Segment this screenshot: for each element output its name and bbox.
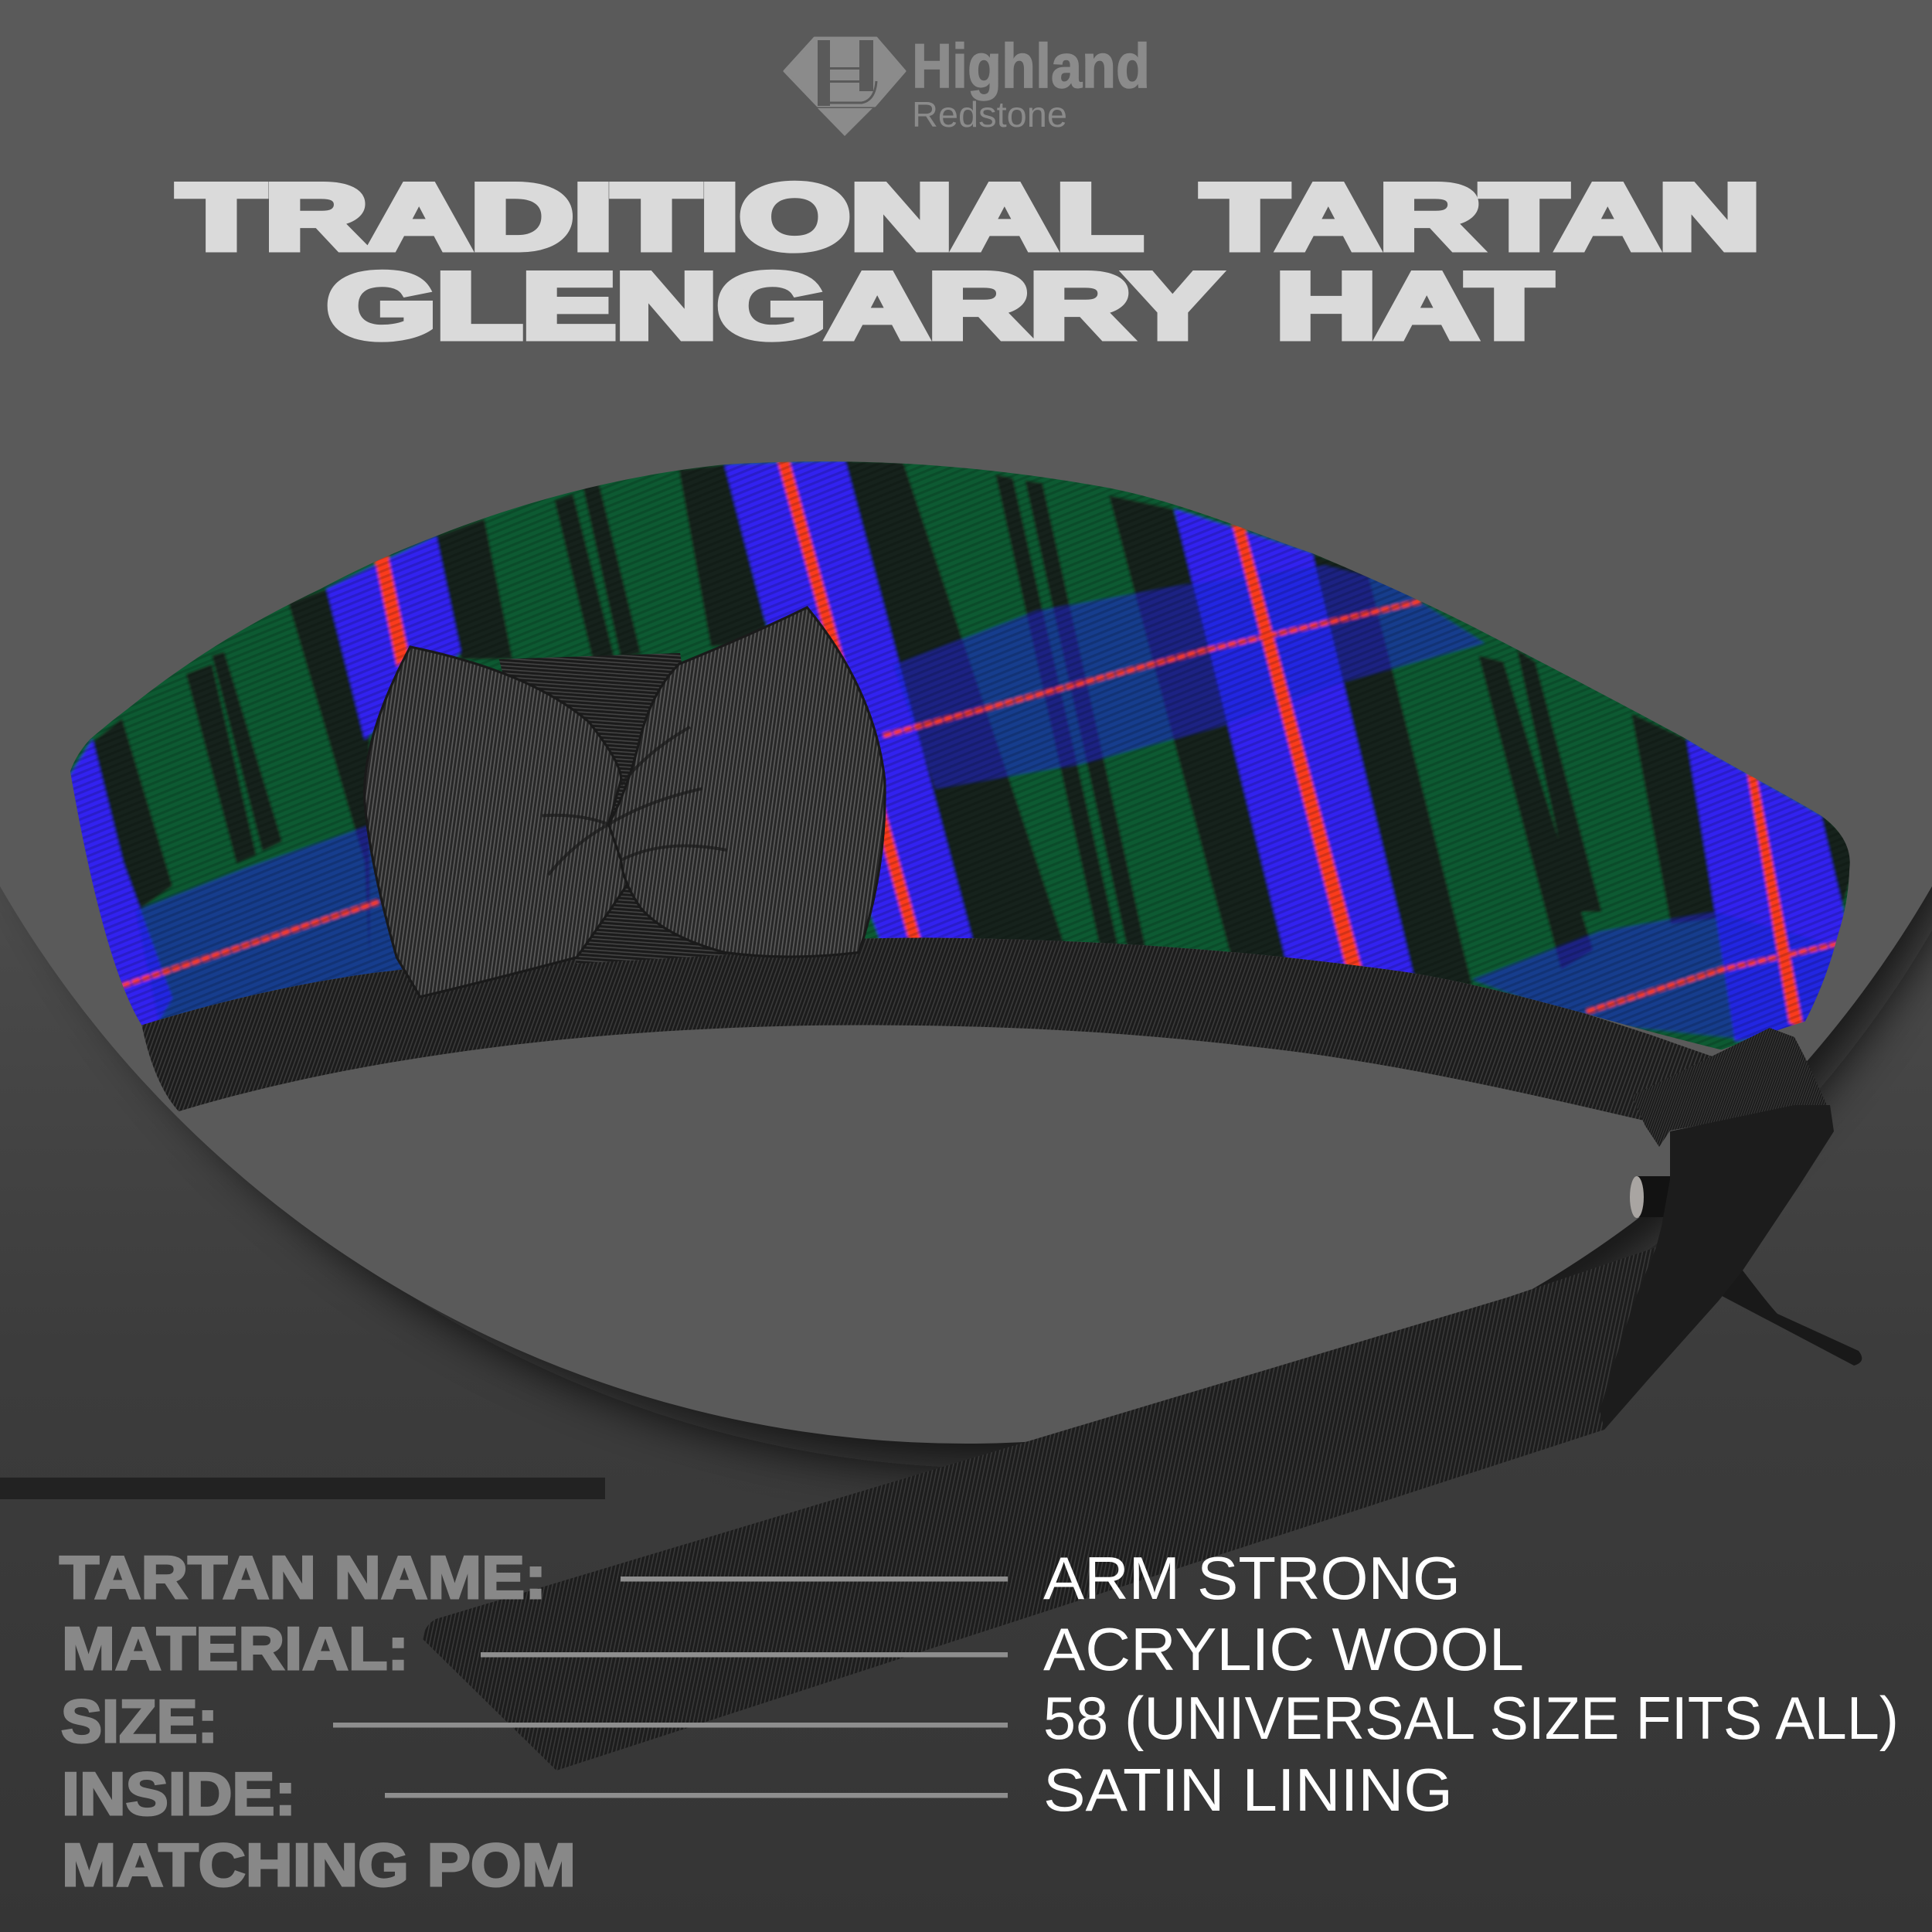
tartan crown bbox=[49, 444, 1872, 1060]
crown and bow bbox=[49, 444, 1872, 1124]
value: material: ACRYLIC WOOL bbox=[1043, 1615, 1524, 1683]
headband bbox=[141, 937, 1721, 1124]
value: inside: SATIN LINING bbox=[1043, 1756, 1453, 1824]
label: material: MATERIAL: bbox=[62, 1614, 409, 1682]
spotlight circle bbox=[0, 0, 1932, 1444]
title line 1: TARTAN bbox=[1202, 165, 1760, 269]
title line 2: HAT bbox=[1276, 254, 1552, 358]
strap loop bbox=[1631, 1028, 1827, 1147]
logo wordmark: Highland bbox=[912, 32, 1150, 101]
hat bbox=[49, 444, 1872, 1770]
logo mark bbox=[784, 38, 905, 136]
tail ribbon bbox=[423, 1247, 1656, 1770]
label: tartan name: TARTAN NAME: bbox=[60, 1543, 546, 1611]
bow left lobe bbox=[365, 647, 641, 997]
spec labels bbox=[60, 1543, 576, 1899]
title bbox=[178, 165, 1760, 358]
bow knot band bbox=[499, 653, 727, 964]
spec values bbox=[1043, 1544, 1899, 1824]
pin bbox=[1630, 1176, 1672, 1218]
bow pinch folds bbox=[543, 727, 727, 875]
label: size: SIZE: bbox=[61, 1687, 218, 1755]
accent bar bbox=[0, 1478, 605, 1499]
logo sub-wordmark: Redstone bbox=[912, 94, 1067, 134]
value: tartan name: ARM STRONG bbox=[1043, 1544, 1461, 1612]
label: matching pom: MATCHING POM bbox=[62, 1831, 576, 1899]
strap drop bbox=[1600, 1105, 1834, 1430]
value: size: 58 (UNIVERSAL SIZE FITS ALL) bbox=[1043, 1684, 1899, 1752]
title line 1: TRADITIONAL bbox=[178, 165, 1143, 269]
bow bbox=[365, 607, 885, 997]
bow right lobe bbox=[609, 607, 885, 957]
label: inside: INSIDE: bbox=[62, 1760, 296, 1828]
cord bbox=[1712, 1267, 1862, 1366]
logo bbox=[784, 32, 1150, 136]
shadow under spotlight circle bbox=[0, 0, 1932, 1468]
title line 2: GLENGARRY bbox=[327, 254, 1219, 358]
